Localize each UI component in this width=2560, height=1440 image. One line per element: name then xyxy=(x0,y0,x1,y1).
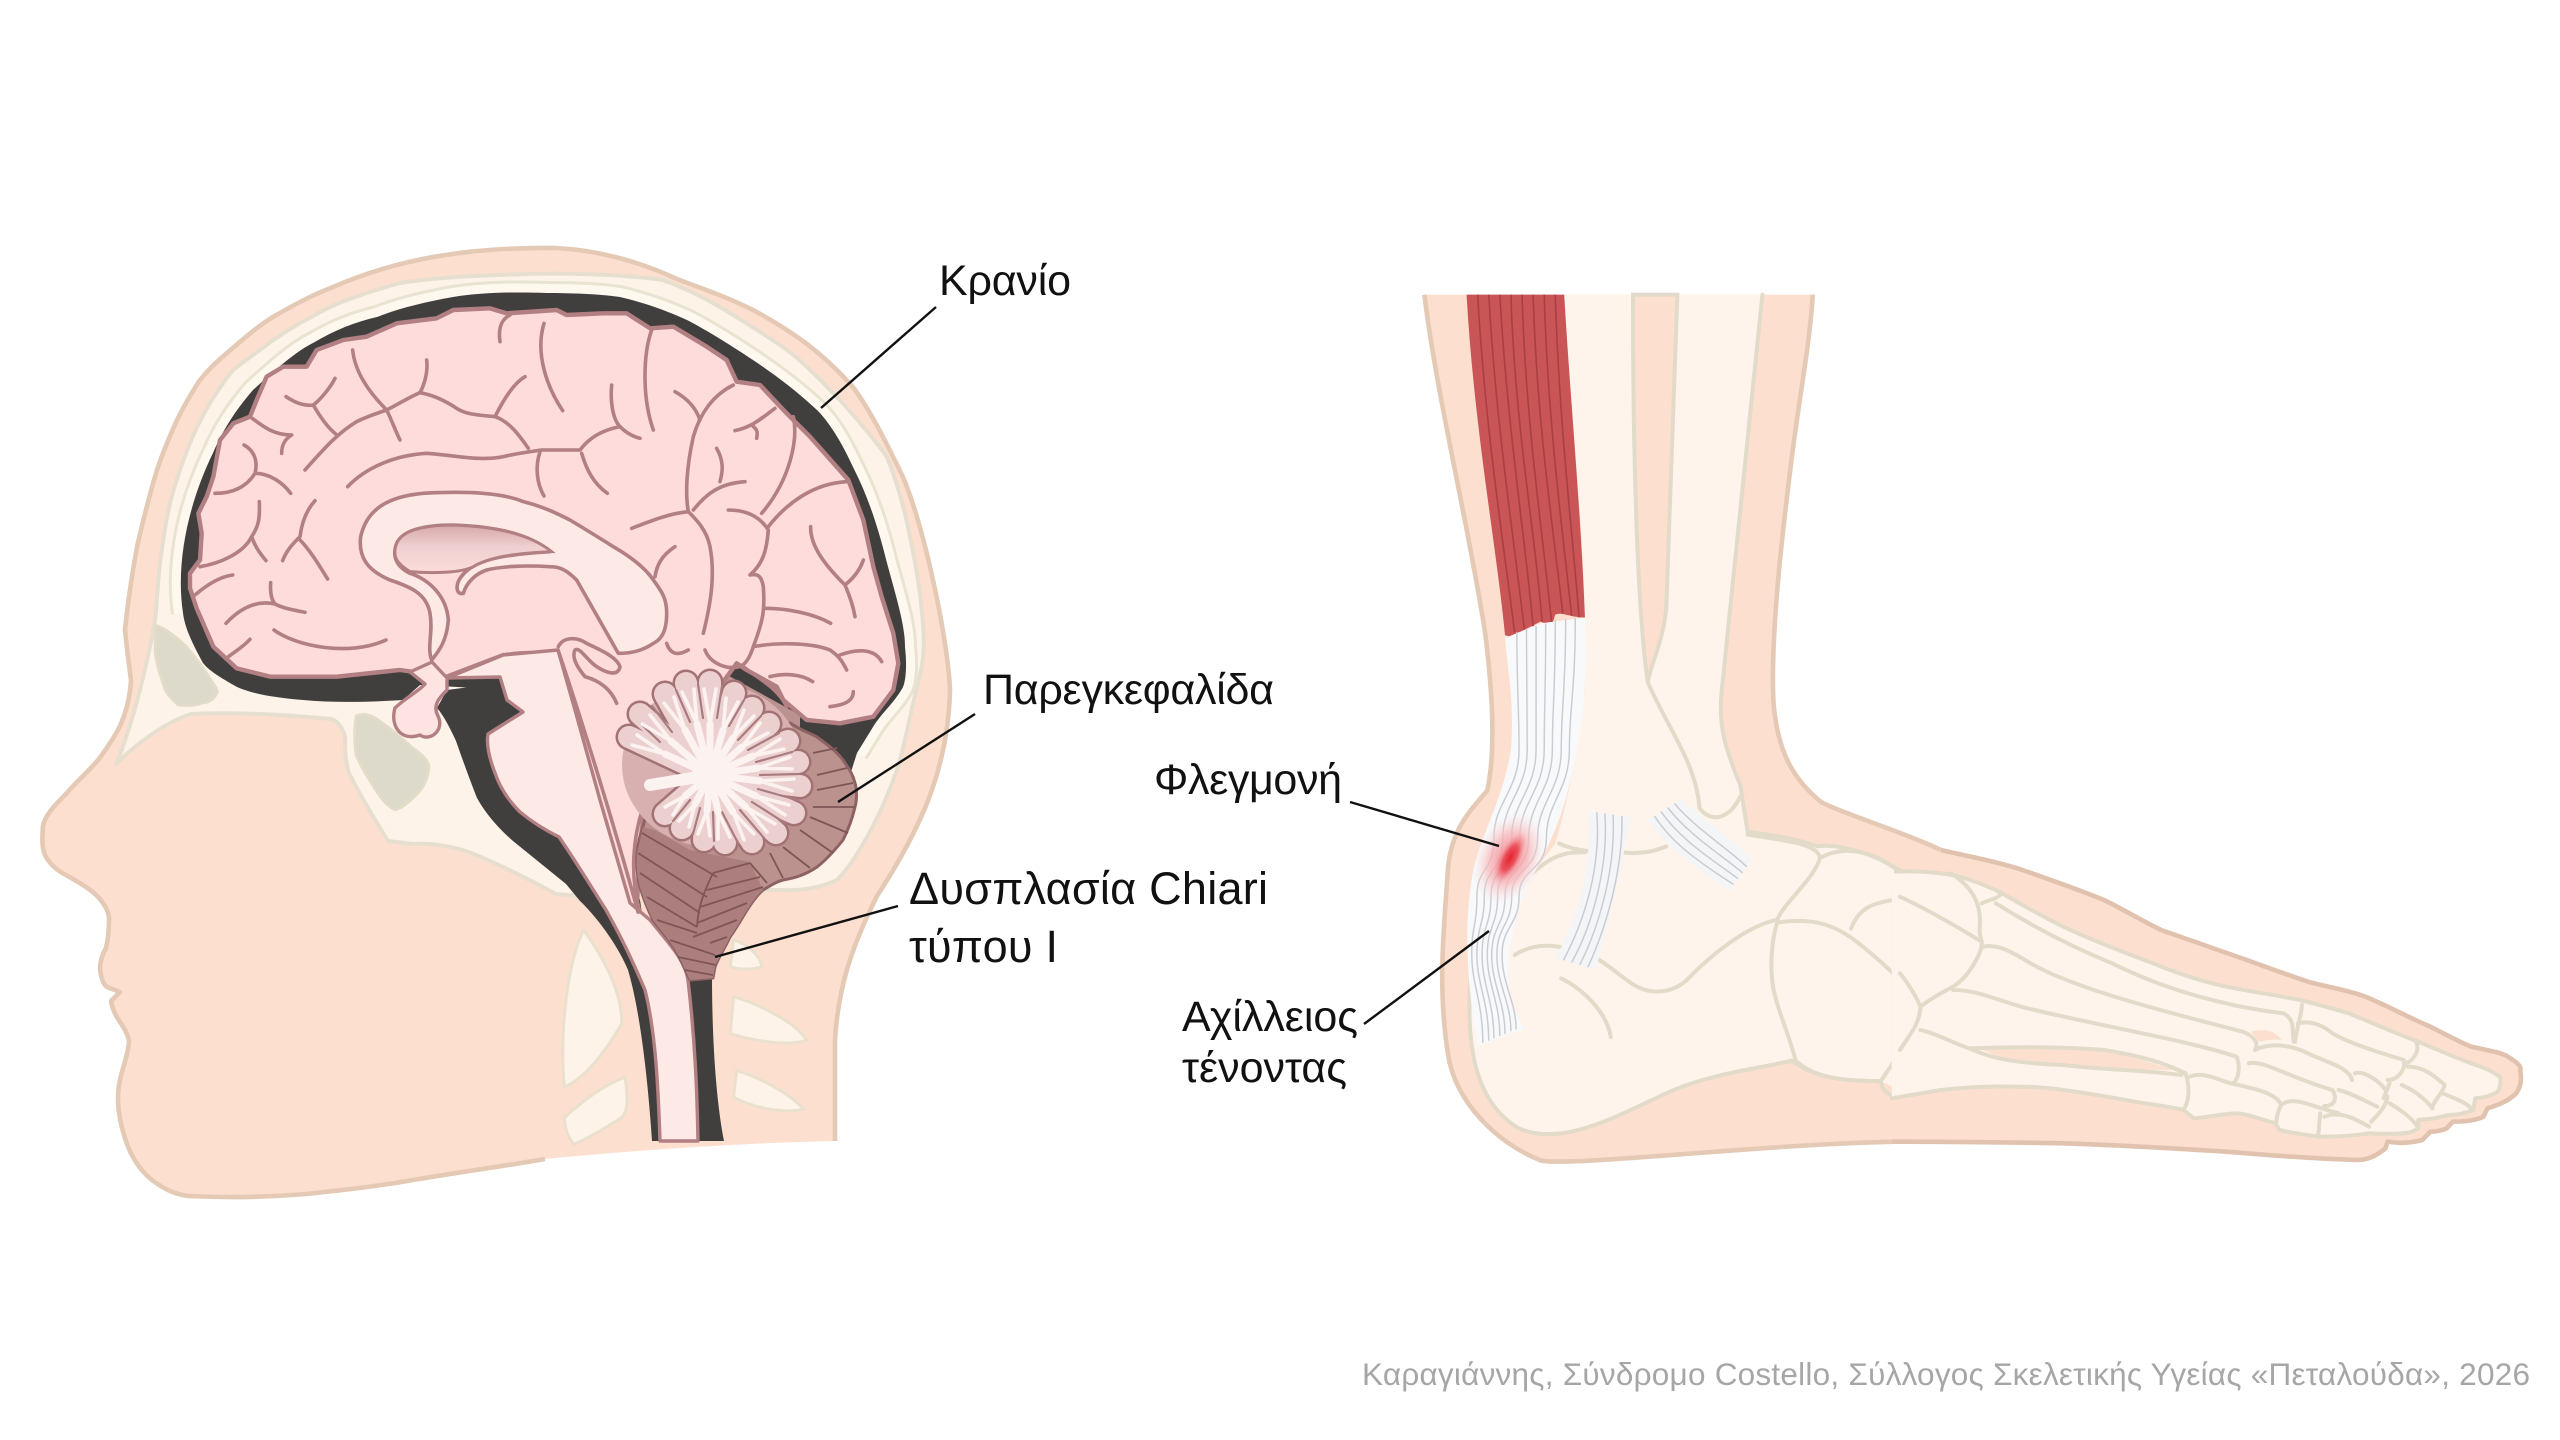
forefoot skin outline xyxy=(1892,850,2521,1160)
label: Δυσπλασία Chiari τύπου I: Δυσπλασία Chiari xyxy=(909,863,1268,914)
brainstem and spinal cord xyxy=(447,650,698,1141)
label: Κρανίο: Κρανίο xyxy=(939,257,1071,305)
label: Δυσπλασία Chiari τύπου I: τύπου Ι xyxy=(909,921,1058,972)
label: Αχίλλειος τένοντας: Αχίλλειος xyxy=(1182,993,1358,1041)
forefoot bone contour lines xyxy=(1900,873,2473,1137)
Achilles tendon xyxy=(1467,617,1586,1046)
tendon fibres xyxy=(1472,618,1575,1043)
label: Παρεγκεφαλίδα xyxy=(838,666,1274,802)
source credit: Καραγιάννης, Σύνδρομο Costello, Σύλλογος Σκελετικής Υγείας «Πεταλούδα», 2026 xyxy=(1362,1356,2530,1392)
inflammation hotspot xyxy=(1459,801,1559,915)
hind foot bones outline xyxy=(1469,295,1903,1134)
head skin silhouette xyxy=(42,248,950,1197)
lateral ventricle xyxy=(395,525,552,573)
sinus: sphenoid xyxy=(354,714,429,810)
forefoot bones fill xyxy=(1892,871,2501,1137)
cerebrum and gyri xyxy=(190,308,898,910)
skull bone xyxy=(116,274,924,896)
leg skin outline xyxy=(1424,295,1941,1162)
hind foot bones fill xyxy=(1469,295,1918,1134)
lower tonsil darker wedge xyxy=(637,827,763,980)
gyri lines xyxy=(195,315,882,707)
skull inner band xyxy=(181,292,906,753)
corpus callosum xyxy=(360,492,667,660)
hind foot and leg xyxy=(1424,295,1947,1162)
calf muscle xyxy=(1467,295,1585,637)
head outline xyxy=(42,248,950,1197)
ligament fibres xyxy=(1563,812,1622,967)
label: Δυσπλασία Chiari τύπου I xyxy=(715,863,1268,972)
ligament: calcaneofibular xyxy=(1555,811,1631,970)
label: Κρανίο xyxy=(821,257,1071,408)
tonsil striations xyxy=(638,833,763,975)
forefoot xyxy=(1892,850,2521,1160)
leg skin fill xyxy=(1424,295,1947,1162)
label: Φλεγμονή xyxy=(1154,756,1499,846)
base of brain line xyxy=(503,653,550,657)
forefoot bones outline xyxy=(1892,871,2501,1137)
aqueduct band line xyxy=(558,650,650,912)
illustration: head and brain sagittal section xyxy=(42,248,950,1197)
skull inner line xyxy=(181,292,906,753)
gap between leg bones xyxy=(1633,295,1677,682)
tissue backing behind cerebellum xyxy=(700,660,800,760)
muscle fibres xyxy=(1478,295,1579,632)
ligament fibres upper xyxy=(1654,804,1747,885)
cerebrum outline xyxy=(190,308,898,910)
spinal canal dark strip xyxy=(688,975,724,1141)
cerebellar radial lines xyxy=(750,748,855,883)
cerebellum arbor vitae xyxy=(622,682,802,847)
cerebrospinal fluid dark space xyxy=(181,292,906,775)
pituitary gland xyxy=(394,662,447,737)
bone contour lines xyxy=(1515,682,1921,1081)
herniated tonsil and cerebellar outer area xyxy=(637,723,856,980)
label: Αχίλλειος τένοντας: τένοντας xyxy=(1182,1044,1347,1092)
label: Φλεγμονή: Φλεγμονή xyxy=(1154,756,1342,804)
label: Αχίλλειος τένοντας xyxy=(1182,931,1489,1092)
forefoot skin fill xyxy=(1892,850,2521,1160)
brainstem dark space xyxy=(437,677,675,1141)
vertebrae xyxy=(563,930,807,1144)
aqueduct loop xyxy=(558,639,620,703)
sinus: frontal xyxy=(155,625,217,706)
label: Παρεγκεφαλίδα: Παρεγκεφαλίδα xyxy=(983,666,1274,714)
metatarsal gap xyxy=(1978,1030,2281,1070)
ligament: talocalcaneal xyxy=(1648,799,1751,890)
illustration: foot and ankle with Achilles tendon xyxy=(1424,295,2521,1162)
